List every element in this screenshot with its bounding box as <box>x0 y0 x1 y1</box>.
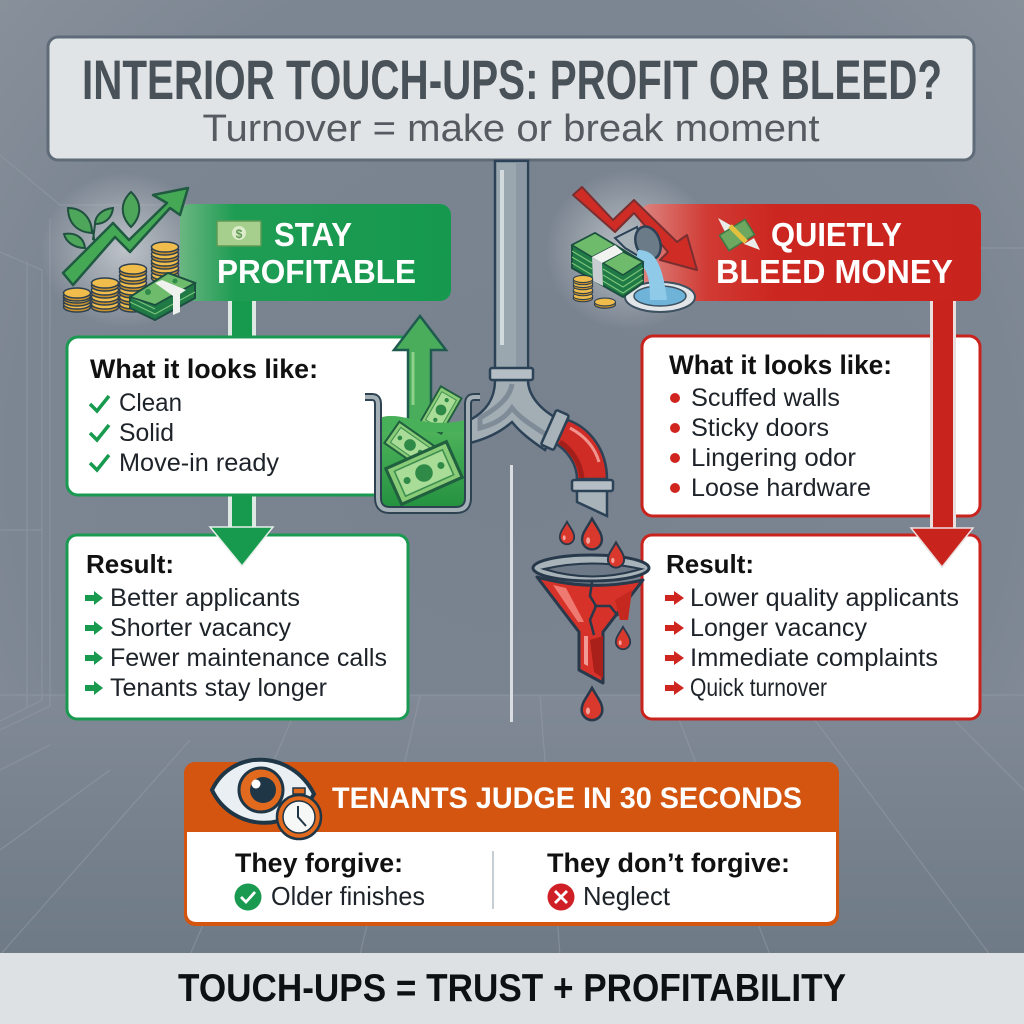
warning list <box>670 384 871 502</box>
result list: Immediate complaints <box>690 644 938 672</box>
heading: Result: <box>86 549 174 579</box>
icon: eye <box>212 760 314 823</box>
they don't forgive: Neglect <box>583 881 671 911</box>
green arrowhead over card <box>210 527 273 566</box>
checklist: Clean <box>119 389 182 417</box>
glow behind loss icon <box>545 170 715 330</box>
heading: Result: <box>666 549 754 579</box>
card: what it looks like (profit) <box>67 337 412 495</box>
warning list: Loose hardware <box>691 474 871 502</box>
green header <box>180 204 451 301</box>
result list: Shorter vacancy <box>110 614 292 642</box>
result list <box>665 584 959 702</box>
they forgive: Older finishes <box>271 881 425 911</box>
icon: cracked funnel with drops <box>533 519 649 720</box>
checklist: Solid <box>119 419 174 447</box>
result list: Longer vacancy <box>690 614 867 642</box>
left column: stay profitable <box>40 172 451 538</box>
result list: Better applicants <box>110 584 300 612</box>
footer band <box>0 953 1024 1024</box>
glow behind growth icon <box>40 172 210 328</box>
heading: TENANTS JUDGE IN 30 SECONDS <box>332 782 802 815</box>
result list: Fewer maintenance calls <box>110 644 387 672</box>
pipe: main pipe splitting into green and red branches <box>470 161 613 516</box>
icon: up arrow from bucket <box>394 316 446 425</box>
card: result (bleed) <box>642 535 980 719</box>
warning list: Scuffed walls <box>691 384 840 412</box>
they forgive: They forgive: <box>235 848 403 878</box>
warning list: Lingering odor <box>691 444 856 472</box>
red header: BLEED MONEY <box>716 253 953 290</box>
heading: What it looks like: <box>669 350 892 380</box>
red connector arrow <box>911 301 973 567</box>
center divider line <box>510 465 513 722</box>
green header: PROFITABLE <box>217 253 416 290</box>
icon: stopwatch <box>277 788 321 839</box>
result list <box>85 584 387 702</box>
checklist: Move-in ready <box>119 449 279 477</box>
result list: Quick turnover <box>690 674 827 702</box>
green connector arrow <box>228 298 256 538</box>
right column: quietly bleed money <box>545 170 981 330</box>
icon: dollar bill <box>217 221 261 246</box>
icon: winged money <box>718 218 760 251</box>
warning list: Sticky doors <box>691 414 829 442</box>
checklist <box>90 389 279 477</box>
they don't forgive: They don’t forgive: <box>547 848 790 878</box>
heading: What it looks like: <box>90 354 318 384</box>
result list: Lower quality applicants <box>690 584 959 612</box>
icon: falling arrow, cash and drain <box>572 187 697 312</box>
icon: bucket of cash <box>365 386 480 510</box>
card: result (profit) <box>67 527 408 719</box>
result list: Tenants stay longer <box>110 674 327 702</box>
card: what it looks like (bleed) <box>642 336 980 516</box>
icon: growth arrow, plants, coins and cash <box>63 188 195 320</box>
heading: QUIETLY <box>771 216 902 253</box>
panel: tenants judge in 30 seconds <box>184 760 839 926</box>
red header <box>640 204 981 301</box>
footer text: TOUCH-UPS = TRUST + PROFITABILITY <box>178 967 846 1010</box>
icon: dollar bill: $ <box>236 227 243 241</box>
subtitle: Turnover = make or break moment <box>202 108 820 150</box>
they forgive <box>234 848 425 911</box>
title banner <box>48 37 974 160</box>
they don't forgive <box>547 848 790 911</box>
heading: STAY <box>274 216 352 253</box>
